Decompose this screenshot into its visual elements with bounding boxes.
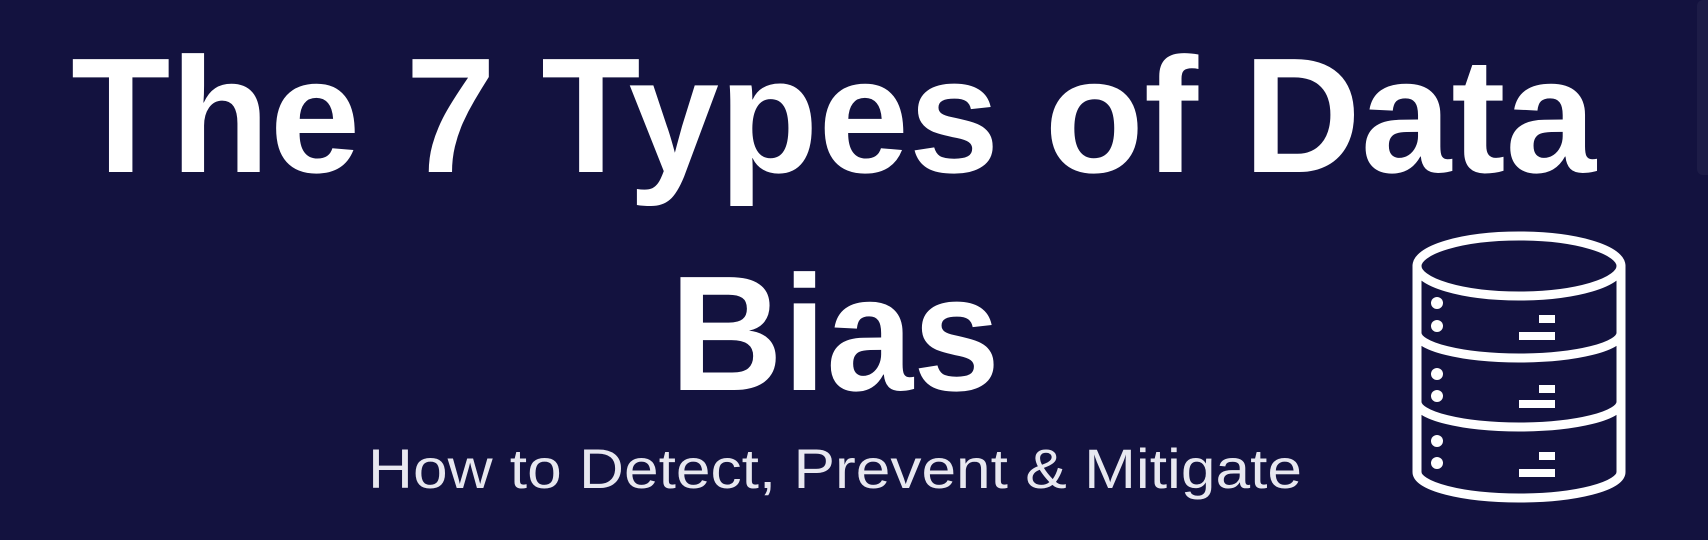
title — [71, 24, 1598, 425]
title line 1: The 7 Types of Data — [71, 24, 1598, 207]
subtitle: How to Detect, Prevent & Mitigate — [368, 437, 1302, 500]
title line 2: Bias — [670, 242, 1000, 425]
icon: database — [1417, 236, 1621, 498]
